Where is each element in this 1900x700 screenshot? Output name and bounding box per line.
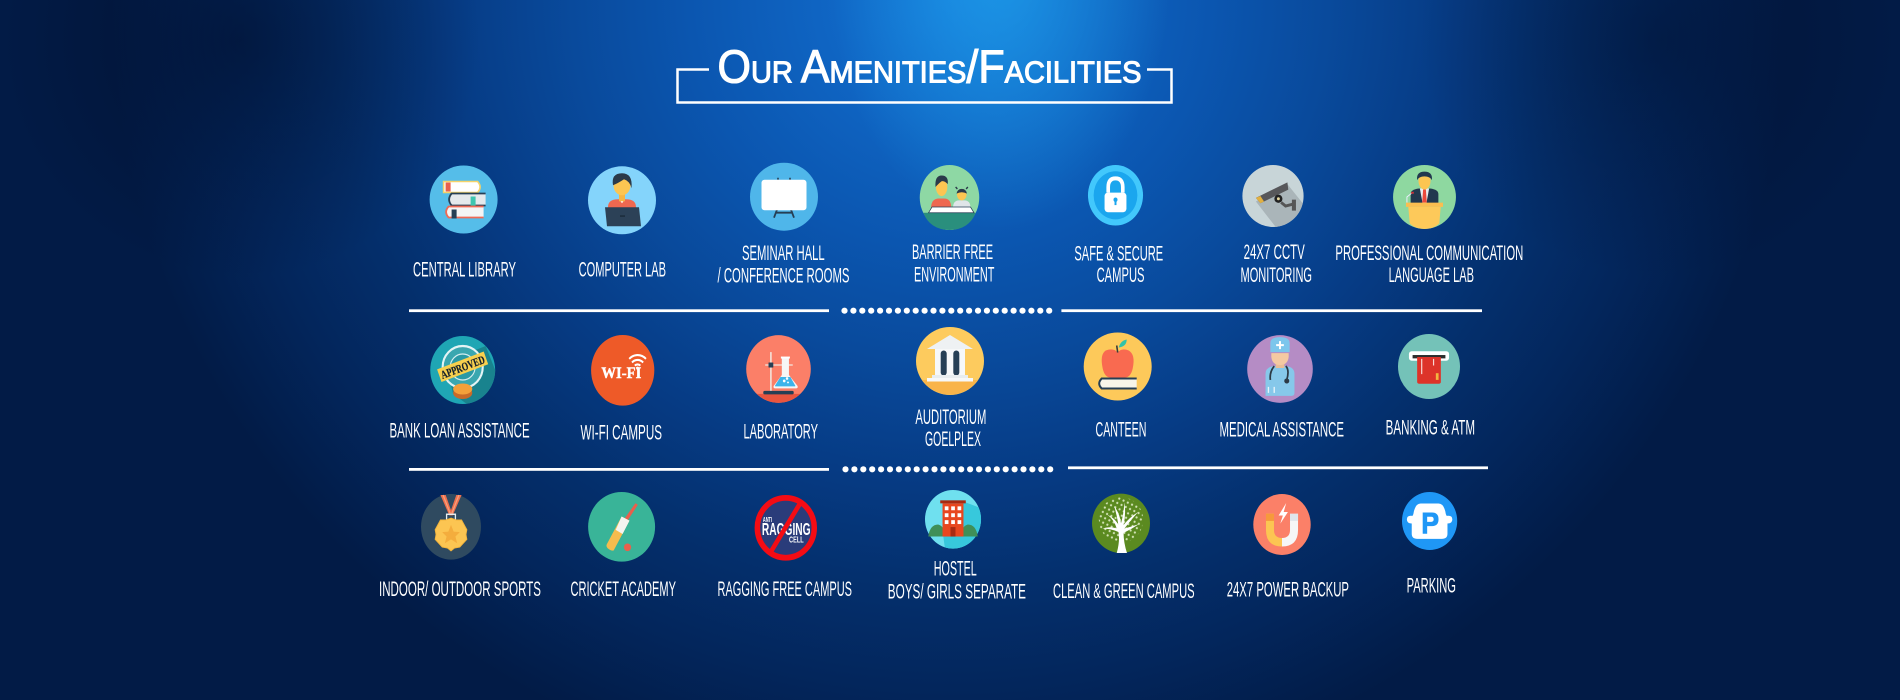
icon: approved stamp [430, 336, 495, 404]
item: indoor outdoor sports [379, 494, 541, 601]
item: central library [413, 166, 516, 282]
icon: magnet and lightning [1253, 494, 1311, 555]
label: CAMPUS [1097, 263, 1144, 287]
item: hostel [888, 490, 1026, 604]
label: CRICKET ACADEMY [570, 577, 676, 601]
label: CLEAN & GREEN CAMPUS [1053, 579, 1195, 603]
label: PARKING [1407, 574, 1456, 598]
item: auditorium goelplex [915, 327, 986, 451]
label: RAGGING FREE CAMPUS [718, 577, 852, 601]
label: / CONFERENCE ROOMS [718, 263, 850, 287]
label: CENTRAL LIBRARY [413, 258, 516, 282]
label: 24X7 POWER BACKUP [1227, 578, 1349, 602]
item: wi-fi campus [580, 335, 662, 444]
label: MEDICAL ASSISTANCE [1220, 418, 1344, 442]
item: cricket academy [570, 492, 676, 601]
item: computer lab [579, 166, 666, 282]
icon: padlock [1088, 165, 1143, 226]
item: laboratory [744, 335, 818, 444]
item: safe and secure campus [1074, 165, 1163, 287]
icon: speaker at podium [1393, 165, 1456, 229]
icon: classical building [916, 327, 984, 395]
icon: teacher and child [920, 165, 979, 230]
divider: row one [409, 308, 1482, 314]
icon: wi-fi: WI-FI [601, 364, 641, 382]
icon: anti ragging sign: CELL [789, 534, 804, 544]
icon: hostel building [925, 490, 981, 549]
label: MONITORING [1240, 263, 1312, 287]
icon: approved stamp: APPROVED [439, 354, 487, 382]
item: CCTV monitoring [1240, 165, 1312, 287]
icon: security camera [1242, 165, 1304, 227]
label: COMPUTER LAB [579, 258, 666, 282]
title block [678, 41, 1172, 102]
icon: doctor [1247, 335, 1313, 403]
icon: apple on book [1084, 332, 1152, 400]
icon: flask [746, 335, 811, 403]
label: SAFE & SECURE [1074, 242, 1163, 266]
heading: OUR AMENITIES/FACILITIES [718, 41, 1142, 93]
label [1240, 240, 1312, 287]
label: BARRIER FREE [912, 240, 993, 264]
icon: presentation board [750, 163, 818, 231]
label: SEMINAR HALL [742, 241, 825, 265]
item: bank loan assistance [390, 336, 530, 443]
label [888, 557, 1026, 604]
item: power backup [1227, 494, 1349, 602]
label: 24X7 CCTV [1244, 240, 1305, 264]
icon: tree [1092, 494, 1150, 553]
icon: medal [421, 494, 481, 560]
item: barrier free environment [912, 165, 994, 286]
label: ENVIRONMENT [914, 262, 994, 286]
label [1335, 241, 1523, 287]
item: seminar hall [718, 163, 850, 287]
item: clean and green campus [1053, 494, 1195, 603]
icon: card in ATM slot [1398, 334, 1460, 399]
icon: car with P [1402, 492, 1457, 550]
icon: person at laptop [588, 166, 656, 234]
item: professional communication language lab [1335, 165, 1523, 287]
icon: anti ragging sign [757, 498, 814, 558]
item: banking and ATM [1386, 334, 1475, 440]
item: canteen: CANTEEN [1096, 418, 1146, 442]
label: LANGUAGE LAB [1389, 263, 1474, 287]
label: PROFESSIONAL COMMUNICATION [1335, 241, 1523, 265]
label [915, 405, 986, 451]
label [718, 241, 850, 287]
label: INDOOR/ OUTDOOR SPORTS [379, 577, 541, 601]
icon: anti ragging sign: RAGGING [762, 520, 811, 539]
label: HOSTEL [934, 557, 977, 581]
label: AUDITORIUM [915, 405, 986, 429]
label: BANK LOAN ASSISTANCE [390, 419, 530, 443]
label: BANKING & ATM [1386, 416, 1475, 440]
label: GOELPLEX [925, 427, 981, 451]
title bracket [678, 70, 1172, 102]
label: BOYS/ GIRLS SEPARATE [888, 580, 1026, 604]
icon: cricket bat and ball [588, 492, 655, 562]
item: medical assistance [1220, 335, 1344, 442]
icon: anti ragging sign: ANTI [763, 515, 772, 524]
label: WI-FI CAMPUS [580, 420, 662, 444]
label [1074, 242, 1163, 287]
label: LABORATORY [744, 420, 818, 444]
item: canteen [1084, 332, 1152, 442]
icon: books [430, 166, 498, 234]
label [912, 240, 994, 286]
item: ragging free campus [718, 498, 852, 601]
item: parking [1402, 492, 1457, 598]
divider: row two [409, 466, 1488, 472]
